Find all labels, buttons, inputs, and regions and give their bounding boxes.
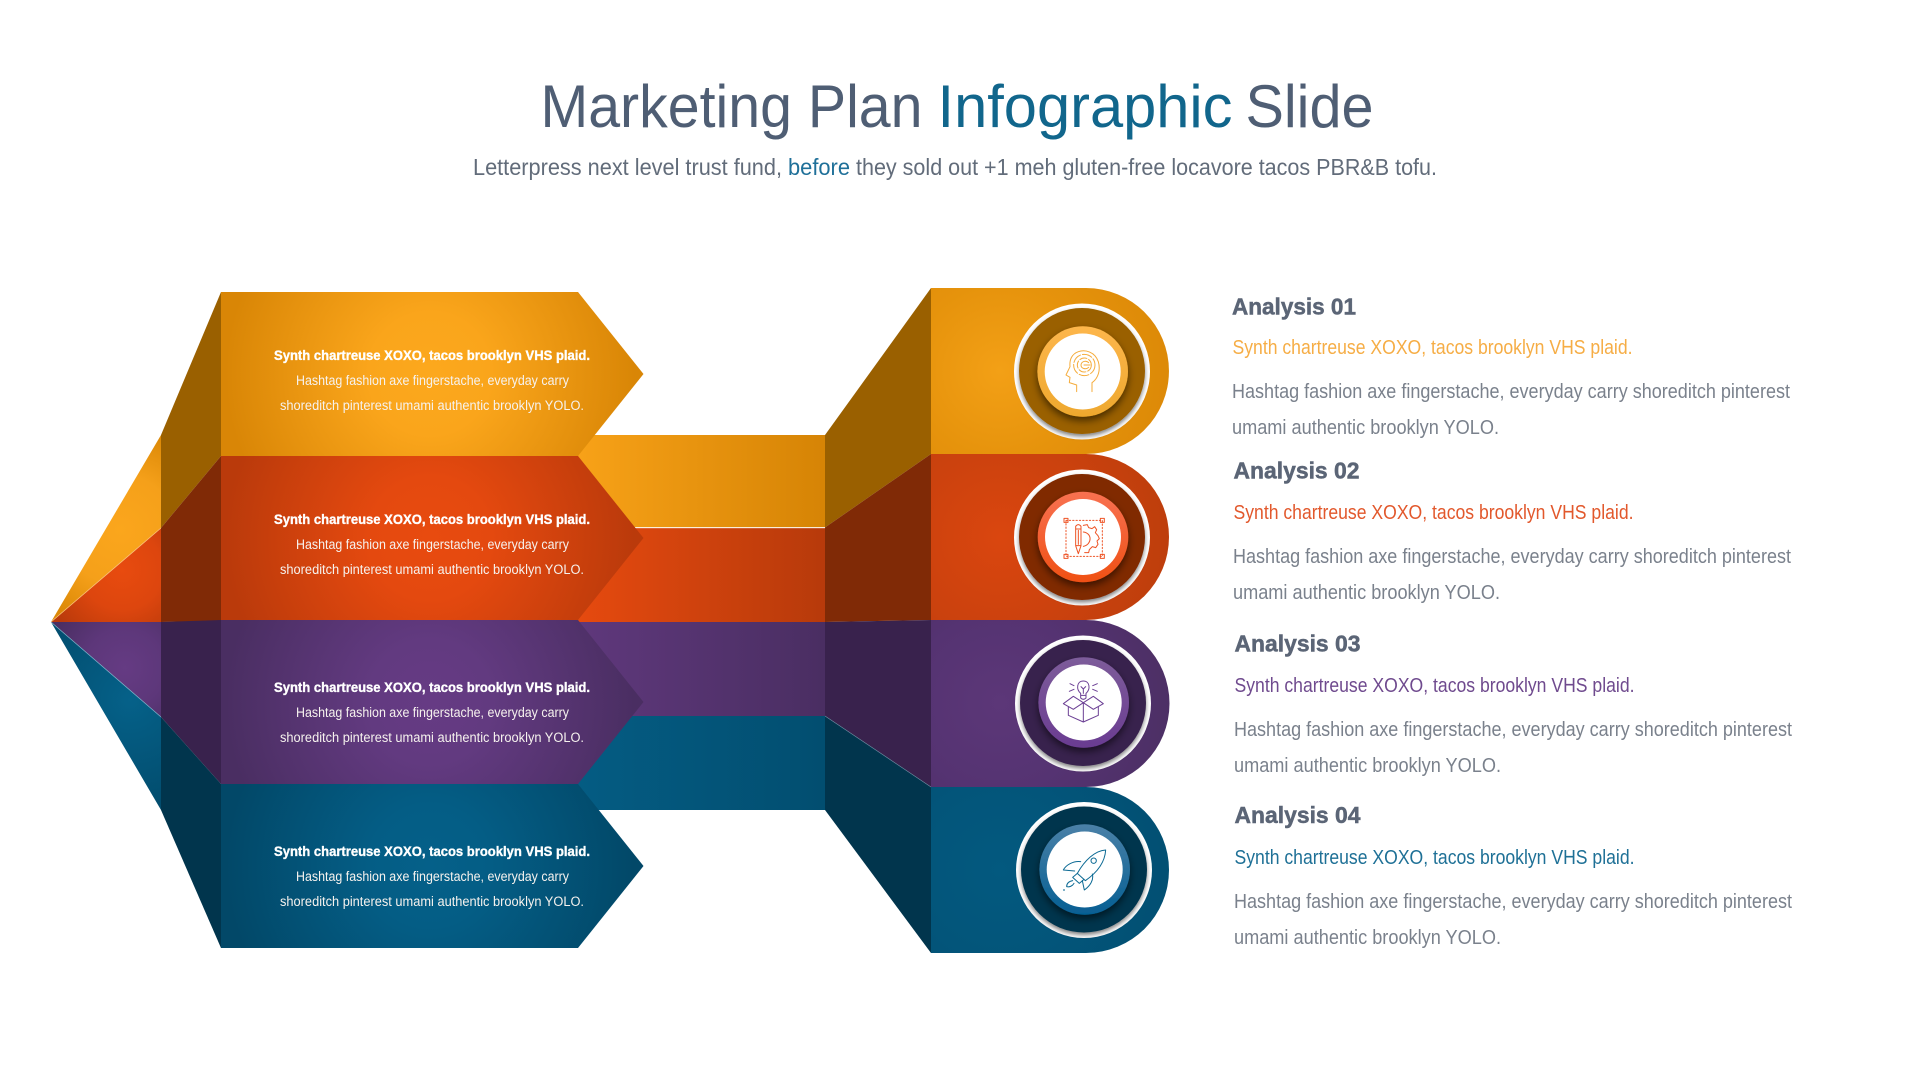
chart: folded arrow diagram <box>51 288 1170 953</box>
right dark fold <box>825 288 931 953</box>
text block: Analysis 02: Analysis 02 <box>1234 458 1360 484</box>
text block: Analysis 01 <box>1232 294 1790 439</box>
text block: Analysis 04: Synth chartreuse XOXO, tacos brooklyn VHS plaid. <box>1234 847 1634 869</box>
text block: Analysis 01: Hashtag fashion axe fingerstache, everyday carry shoreditch pinterest <box>1232 381 1790 403</box>
arrow 2: red: Synth chartreuse XOXO, tacos brooklyn VHS plaid. <box>274 511 590 527</box>
icon: rocket <box>1063 850 1106 890</box>
text block: Analysis 01: Analysis 01 <box>1232 294 1356 320</box>
arrow 3: purple: Synth chartreuse XOXO, tacos brooklyn VHS plaid. <box>274 679 590 695</box>
arrow 1: orange: shoreditch pinterest umami authentic brooklyn YOLO. <box>280 398 584 413</box>
arrow 3: purple: shoreditch pinterest umami authentic brooklyn YOLO. <box>280 730 584 745</box>
title: Marketing Plan <box>540 73 922 140</box>
arrow 2: red <box>221 456 644 620</box>
text block: Analysis 03: Synth chartreuse XOXO, tacos brooklyn VHS plaid. <box>1234 675 1634 697</box>
title: Slide <box>1246 73 1374 140</box>
left dark fold <box>161 292 221 948</box>
subtitle <box>473 154 1437 180</box>
title: Infographic <box>938 73 1232 140</box>
text block: Analysis 04: Hashtag fashion axe fingerstache, everyday carry shoreditch pinterest <box>1234 891 1792 913</box>
title <box>540 73 1374 140</box>
text block: Analysis 04: Analysis 04 <box>1234 802 1361 828</box>
left arrowhead faces <box>51 435 161 810</box>
icon: pencil and gear <box>1064 518 1104 558</box>
arrow 3: purple <box>221 620 644 784</box>
text block: Analysis 02: Synth chartreuse XOXO, tacos brooklyn VHS plaid. <box>1234 502 1634 524</box>
icon: idea box <box>1063 681 1103 722</box>
text block: Analysis 03: Analysis 03 <box>1234 630 1360 656</box>
pill 4: teal with rocket icon <box>931 787 1169 953</box>
text block: Analysis 01: Synth chartreuse XOXO, tacos brooklyn VHS plaid. <box>1232 337 1632 359</box>
text block: Analysis 02: Hashtag fashion axe fingerstache, everyday carry shoreditch pinterest <box>1233 546 1791 568</box>
pill 2: red with design icon <box>931 454 1169 620</box>
text block: Analysis 03 <box>1234 630 1792 777</box>
arrow 4: teal: Hashtag fashion axe fingerstache, everyday carry <box>296 869 569 884</box>
subtitle: before <box>788 154 850 180</box>
arrow 1: orange <box>221 292 644 456</box>
arrow 4: teal: shoreditch pinterest umami authentic brooklyn YOLO. <box>280 894 584 909</box>
text block: Analysis 02 <box>1233 458 1791 604</box>
icon: head maze <box>1066 351 1099 392</box>
pill 3: purple with box icon <box>931 620 1170 787</box>
arrow 4: teal: Synth chartreuse XOXO, tacos brooklyn VHS plaid. <box>274 843 590 859</box>
subtitle: they sold out +1 meh gluten-free locavore tacos PBR&B tofu. <box>856 154 1437 180</box>
text block: Analysis 04: umami authentic brooklyn YOLO. <box>1234 927 1501 949</box>
pill 1: orange with head icon <box>931 288 1169 454</box>
arrow 2: red: Hashtag fashion axe fingerstache, everyday carry <box>296 537 569 552</box>
subtitle: Letterpress next level trust fund, <box>473 154 782 180</box>
text block: Analysis 01: umami authentic brooklyn YOLO. <box>1232 417 1499 439</box>
text block: Analysis 04 <box>1234 802 1792 949</box>
connector strips <box>575 435 825 810</box>
arrow 1: orange: Hashtag fashion axe fingerstache, everyday carry <box>296 373 569 388</box>
arrow 1: orange: Synth chartreuse XOXO, tacos brooklyn VHS plaid. <box>274 347 590 363</box>
arrow 3: purple: Hashtag fashion axe fingerstache, everyday carry <box>296 705 569 720</box>
text block: Analysis 02: umami authentic brooklyn YOLO. <box>1233 582 1500 604</box>
text block: Analysis 03: umami authentic brooklyn YOLO. <box>1234 755 1501 777</box>
text block: Analysis 03: Hashtag fashion axe fingerstache, everyday carry shoreditch pinterest <box>1234 719 1792 741</box>
arrow 2: red: shoreditch pinterest umami authentic brooklyn YOLO. <box>280 562 584 577</box>
arrow 4: teal <box>221 784 644 948</box>
